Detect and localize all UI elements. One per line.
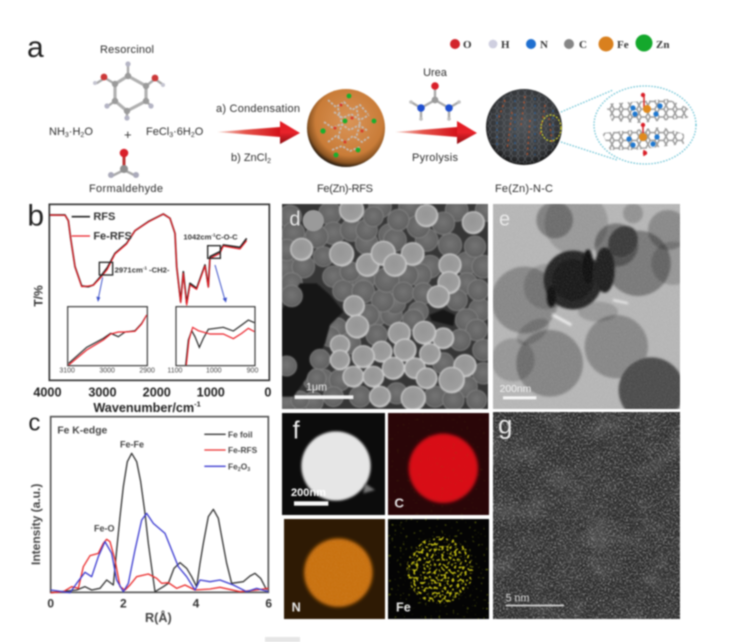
label Resorcinol: Resorcinol: [100, 44, 154, 56]
panel letter b: b: [27, 199, 44, 232]
panel: Fe elemental map: [386, 518, 490, 620]
scale bar 200 nm: 200nm: [500, 384, 531, 395]
panel: a synthesis scheme: [27, 31, 696, 195]
arrow: pyrolysis: [395, 121, 477, 144]
label Fe: Fe: [396, 600, 411, 614]
x tick labels: 2: [120, 596, 127, 610]
molecule: formaldehyde: [108, 149, 139, 178]
bright particle: [301, 431, 375, 501]
legend: 3: [247, 467, 250, 473]
scale bar 5 nm: 5 nm: [506, 593, 529, 605]
y axis title: Intensity (a.u.): [29, 484, 43, 565]
reagent FeCl3·6H2O: O: [195, 126, 204, 138]
curve: Fe-RFS: [50, 214, 247, 305]
legend: [72, 211, 132, 242]
legend of atoms: O: [463, 39, 472, 51]
x tick labels: 4: [193, 596, 200, 610]
label Fe K-edge: Fe K-edge: [57, 425, 108, 436]
label Fe-O: Fe-O: [94, 524, 115, 534]
panel letter a: a: [27, 31, 44, 64]
legend: [204, 429, 258, 473]
reagent NH3·H2O: 2: [80, 132, 84, 139]
panel: d SEM image: [281, 203, 489, 410]
legend of atoms: [450, 34, 669, 52]
inset left: 3000: [99, 368, 115, 375]
x tick labels: 0: [47, 596, 54, 610]
x axis title: R(Å): [145, 610, 172, 625]
molecule: resorcinol: [93, 61, 165, 121]
y axis label: T/%: [31, 285, 45, 307]
x tick labels: 4000: [33, 386, 61, 400]
panel letter f: f: [293, 417, 301, 445]
x tick labels: 3000: [88, 386, 116, 400]
panel letter d: d: [289, 208, 300, 230]
curve: RFS: [50, 214, 247, 303]
label Urea: Urea: [423, 67, 448, 79]
legend: O: [241, 461, 248, 471]
scale bar 200 nm: [500, 384, 536, 399]
label b) ZnCl2: b) ZnCl: [231, 152, 267, 164]
panel: c EXAFS: [28, 410, 273, 626]
x tick labels: 0: [264, 386, 271, 400]
panel: C elemental map: [386, 412, 490, 516]
annotation 1042: -1: [211, 233, 216, 238]
scale bar 1 µm: [295, 382, 353, 399]
reagent FeCl3·6H2O: FeCl: [146, 126, 169, 138]
legend: Fe foil: [228, 429, 253, 439]
panel letter e: e: [499, 208, 510, 230]
panel: N elemental map: [282, 518, 386, 620]
inset right: 1000: [206, 368, 222, 375]
annotation 1042: C-O-C: [216, 232, 238, 241]
reagent NH3·H2O: ·H: [69, 126, 80, 138]
plot frame: [51, 417, 268, 592]
sphere: Fe(Zn)-N-C: [486, 89, 562, 165]
inset right: 1100: [167, 368, 182, 375]
label Fe(Zn)-RFS: Fe(Zn)-RFS: [317, 183, 373, 195]
scale bar 1 µm: 1μm: [306, 382, 327, 394]
label a) Condensation: a) Condensation: [216, 103, 300, 115]
label b) ZnCl2: 2: [267, 158, 271, 165]
arrow: condensation: [217, 121, 300, 144]
sphere: Fe(Zn)-RFS: [307, 89, 385, 167]
curve: Fe-RFS: [51, 539, 268, 593]
legend: RFS: [93, 211, 115, 223]
x tick labels: [33, 386, 271, 400]
panel letter g: g: [498, 409, 512, 439]
panel: b FTIR spectrum: [27, 199, 272, 415]
inset right: [167, 307, 258, 375]
x axis title: Wavenumber/cm: [93, 401, 194, 415]
legend of atoms: H: [501, 39, 510, 51]
curve: Fe foil: [51, 453, 267, 593]
plus sign: +: [124, 127, 132, 142]
panel: g HRTEM image: [492, 409, 681, 620]
label C: C: [394, 496, 404, 511]
label Fe(Zn)-N-C: Fe(Zn)-N-C: [495, 183, 553, 195]
panel: f dark-field image: [280, 412, 386, 516]
annotation 2971: -CH2-: [147, 265, 170, 274]
reagent NH3·H2O: NH: [49, 126, 65, 138]
legend: Fe-RFS: [228, 445, 258, 455]
annotation 2971: 2971cm: [115, 265, 143, 274]
legend of atoms: Zn: [656, 39, 669, 51]
curve: Fe2O3: [51, 513, 268, 593]
nitrogen particle: [304, 538, 373, 607]
grey artefact at bottom edge: [265, 637, 300, 642]
reagent NH3·H2O: O: [84, 126, 93, 138]
highlight ellipse: [541, 115, 561, 141]
legend of atoms: Fe: [617, 39, 629, 51]
legend: Fe: [228, 461, 238, 471]
x axis title: -1: [194, 400, 201, 409]
reagent NH3·H2O: 3: [65, 132, 69, 139]
legend: Fe-RFS: [93, 230, 132, 242]
reagent FeCl3·6H2O: 3: [169, 132, 173, 139]
x tick labels: 2000: [143, 386, 171, 400]
panel letter c: c: [28, 410, 40, 437]
legend of atoms: N: [540, 39, 548, 51]
plot frame: [49, 204, 269, 380]
scale bar 200 nm: 200nm: [291, 487, 326, 499]
label N: N: [292, 600, 301, 614]
x tick labels: 1000: [197, 386, 225, 400]
x tick labels: [47, 596, 272, 610]
label Formaldehyde: Formaldehyde: [89, 183, 163, 195]
legend: 2: [238, 467, 241, 473]
highlight boxes and arrows: [96, 246, 227, 303]
carbon particle: [409, 434, 478, 503]
debris: [303, 210, 324, 231]
inset right: 900: [247, 368, 258, 375]
inset left: [59, 307, 155, 375]
scale bar 5 nm: [506, 593, 564, 606]
inset left: 3100: [59, 368, 75, 375]
inset left: 2900: [139, 368, 155, 375]
sparse iron signal: [388, 519, 489, 619]
reagent FeCl3·6H2O: 2: [191, 132, 195, 139]
zoom callout: atomic structure: [561, 86, 696, 164]
molecule: urea: [409, 82, 461, 121]
annotation 2971: -1: [143, 266, 147, 271]
legend of atoms: C: [579, 39, 587, 51]
panel: e TEM image: [492, 203, 681, 410]
x tick labels: 6: [265, 596, 272, 610]
annotation 1042: 1042cm: [183, 232, 211, 241]
label Pyrolysis: Pyrolysis: [412, 152, 458, 164]
reagent FeCl3·6H2O: ·6H: [173, 126, 191, 138]
iron particle: [406, 536, 474, 604]
label Fe-Fe: Fe-Fe: [120, 440, 144, 450]
